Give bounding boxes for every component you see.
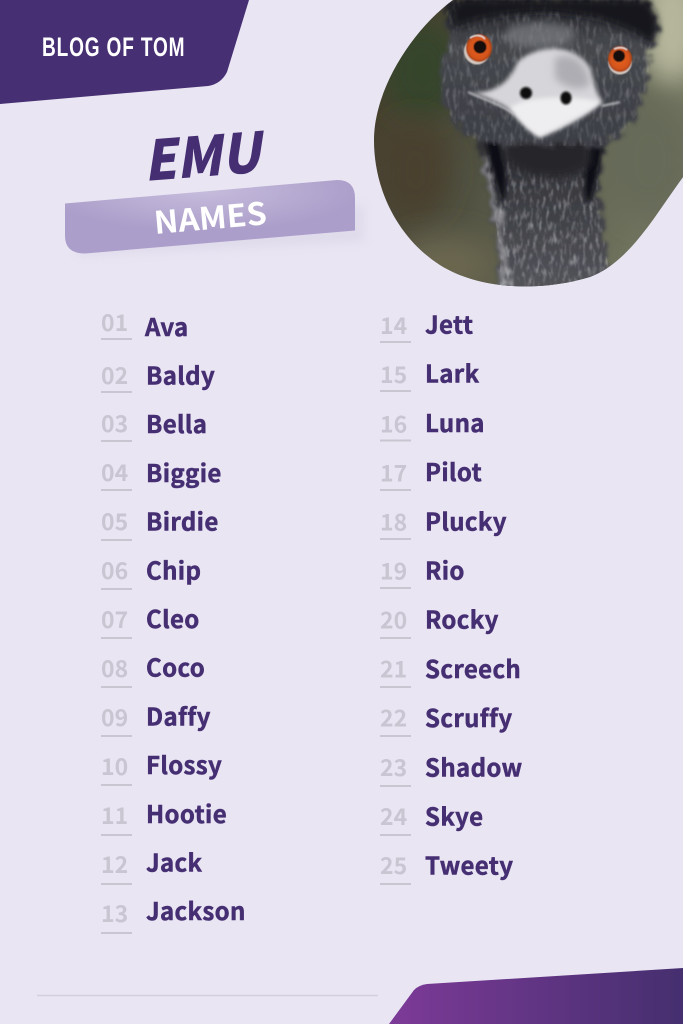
- name row 17: 17: [380, 454, 407, 488]
- name row 21: Screech: [425, 650, 521, 685]
- name row 04: [101, 454, 222, 491]
- name row 08: [101, 649, 205, 688]
- header tab: Blog of Tom: [0, 0, 249, 104]
- name row 24: 24: [380, 798, 407, 832]
- name row 05: 05: [101, 503, 128, 537]
- footer rule: [37, 994, 378, 996]
- name row 20: Rocky: [425, 601, 499, 636]
- name row 16: [380, 404, 485, 442]
- name row 23: Shadow: [425, 748, 523, 783]
- name row 20: 20: [380, 602, 407, 636]
- name row 10: 10: [101, 748, 128, 782]
- name row 07: Cleo: [146, 600, 200, 635]
- name row 13: [101, 892, 246, 934]
- name row 21: [380, 650, 521, 688]
- name row 13: Jackson: [146, 892, 246, 927]
- photo: emu in blob shape: [370, 0, 683, 295]
- name row 07: [101, 600, 200, 639]
- subtitle text: NAMES: [152, 188, 268, 243]
- name row 02: [101, 356, 215, 393]
- name row 13: 13: [101, 895, 128, 929]
- name row 02: 02: [101, 357, 128, 391]
- name row 22: 22: [380, 700, 407, 734]
- footer tab: [389, 968, 683, 1024]
- name row 25: Tweety: [425, 847, 513, 882]
- title: EMU: EMU: [140, 108, 269, 197]
- name row 23: 23: [380, 749, 407, 783]
- name row 18: 18: [380, 504, 407, 538]
- name row 18: Plucky: [425, 502, 507, 537]
- name row 21: 21: [380, 650, 407, 684]
- name row 01: [101, 304, 189, 343]
- emu head feathers: [440, 0, 657, 146]
- list column 1: [101, 304, 246, 934]
- name row 17: [380, 453, 482, 491]
- title band: Names: [65, 180, 364, 256]
- name row 12: Jack: [146, 844, 203, 878]
- name row 03: 03: [101, 405, 128, 439]
- name row 24: [380, 798, 483, 836]
- name row 06: [101, 551, 201, 590]
- name row 12: 12: [101, 846, 128, 880]
- name row 15: [380, 355, 480, 392]
- name row 15: Lark: [425, 355, 480, 390]
- name row 09: [101, 697, 211, 737]
- emu beak and face: [468, 49, 620, 137]
- name row 04: Biggie: [146, 454, 222, 489]
- name row 12: [101, 844, 203, 885]
- name row 09: 09: [101, 699, 128, 733]
- name row 06: Chip: [146, 551, 201, 586]
- name row 25: 25: [380, 847, 407, 881]
- name row 14: 14: [380, 307, 407, 341]
- name row 08: 08: [101, 650, 128, 684]
- name row 09: Daffy: [146, 697, 211, 732]
- emu neck: [476, 140, 612, 286]
- brand text: BLOG OF TOM: [42, 32, 185, 62]
- name row 01: Ava: [144, 308, 189, 343]
- name row 03: [101, 405, 207, 442]
- name row 19: 19: [380, 552, 407, 586]
- name row 22: Scruffy: [425, 699, 512, 734]
- emu eyes: [464, 34, 632, 74]
- list column 2: [380, 306, 523, 885]
- name row 10: [101, 746, 222, 786]
- name row 02: Baldy: [146, 356, 215, 392]
- name row 03: Bella: [146, 405, 207, 440]
- name row 10: Flossy: [146, 746, 222, 781]
- name row 08: Coco: [146, 649, 205, 684]
- name row 25: [380, 847, 513, 885]
- name row 05: Birdie: [146, 503, 219, 538]
- name row 22: [380, 699, 512, 737]
- name row 14: [380, 306, 473, 343]
- name row 11: [101, 795, 227, 836]
- name row 16: 16: [380, 406, 407, 440]
- emu nostrils: [520, 87, 572, 104]
- name row 11: Hootie: [146, 795, 227, 830]
- name row 14: Jett: [425, 306, 473, 340]
- name row 11: 11: [101, 797, 128, 831]
- name row 19: Rio: [425, 552, 465, 586]
- name row 20: [380, 601, 499, 639]
- name row 19: [380, 552, 465, 589]
- name row 17: Pilot: [425, 453, 482, 488]
- name row 04: 04: [101, 454, 128, 488]
- name row 05: [101, 503, 219, 541]
- name row 18: [380, 502, 507, 540]
- name row 06: 06: [101, 552, 128, 586]
- name row 15: 15: [380, 356, 407, 390]
- name row 23: [380, 748, 523, 787]
- name row 01: 01: [101, 304, 128, 338]
- name row 24: Skye: [425, 798, 483, 832]
- name row 16: Luna: [425, 404, 485, 439]
- name row 07: 07: [101, 601, 128, 635]
